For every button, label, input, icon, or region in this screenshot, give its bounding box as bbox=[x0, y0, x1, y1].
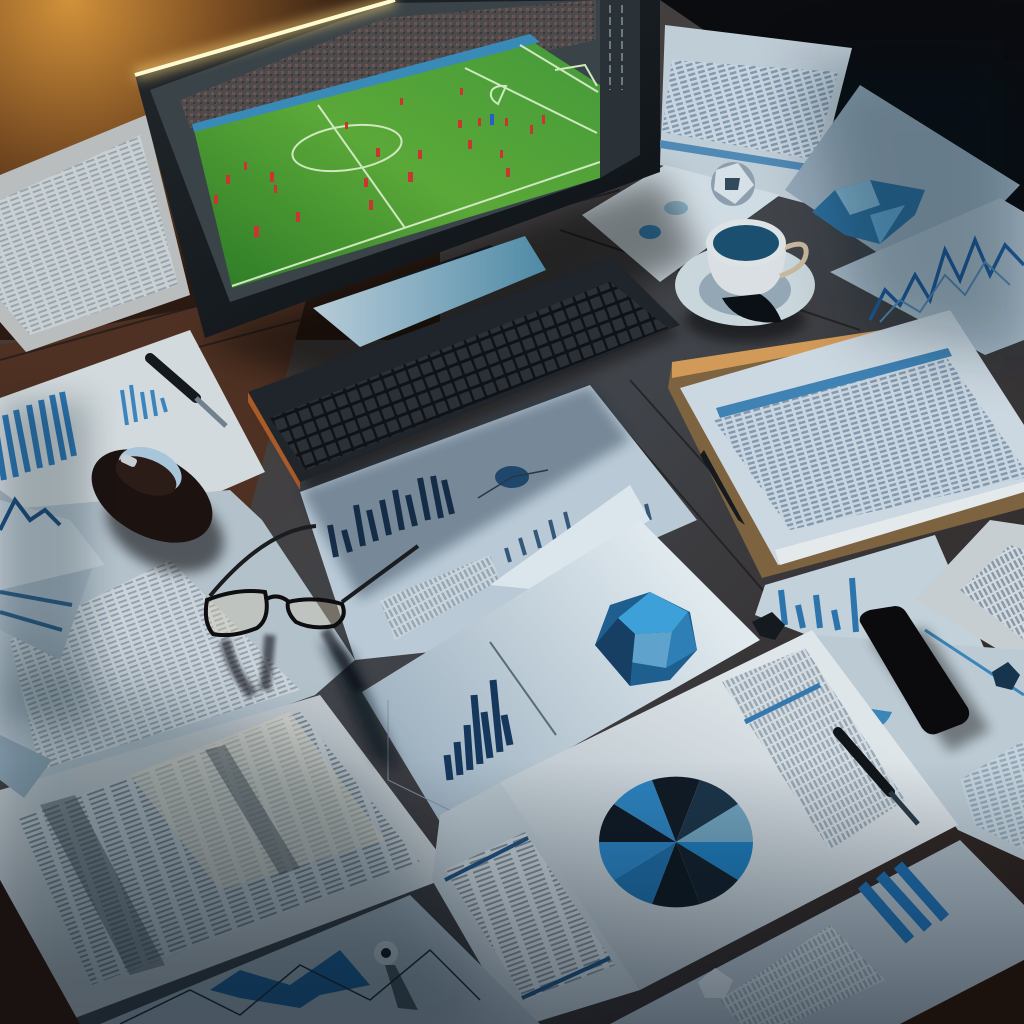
monitor shadow on desk bbox=[200, 175, 700, 400]
paper: line chart right bbox=[830, 198, 1024, 355]
monitor light edge bbox=[135, 0, 395, 75]
monitor stand bbox=[313, 236, 546, 347]
paper: center sheet with bars bbox=[300, 385, 697, 660]
keyboard bbox=[248, 258, 680, 490]
paper: bottom pie sheet bbox=[500, 630, 958, 990]
main shadow from monitor and keyboard bbox=[300, 385, 630, 600]
paper: top right spreadsheet bbox=[660, 25, 852, 205]
bars bbox=[0, 392, 74, 480]
icon: small cubes bbox=[374, 612, 1020, 1010]
players bbox=[214, 88, 545, 237]
paper: bottom line chart bbox=[100, 895, 540, 1024]
coffee cup and saucer bbox=[675, 219, 815, 342]
paper: bottom center table bbox=[432, 780, 640, 1024]
paper: right sheets behind phone bbox=[755, 520, 1024, 860]
paper: sheet with dots behind cup bbox=[582, 165, 780, 282]
paper: polygon pie top right bbox=[785, 85, 1020, 285]
paper: top left spreadsheet bbox=[0, 115, 190, 352]
mouse bbox=[76, 430, 238, 590]
paper: bottom right bars sheet bbox=[610, 840, 1024, 1024]
monitor bbox=[135, 0, 660, 338]
pen bbox=[150, 358, 226, 426]
icon: dots bbox=[639, 201, 688, 239]
pen on pie sheet bbox=[838, 732, 918, 824]
analysis side panel bbox=[600, 0, 640, 178]
icon: crystal ball on papers bbox=[711, 162, 755, 206]
diagonal shadow on lower papers bbox=[320, 640, 400, 770]
curled page bbox=[490, 485, 650, 590]
paper: main chart with polyhedron bbox=[362, 520, 760, 830]
bars bbox=[330, 476, 452, 557]
icon: polyhedron chart bbox=[595, 592, 697, 686]
paper: folded corner sheet bbox=[0, 735, 52, 798]
paper: bar chart with pen bbox=[0, 330, 265, 560]
paper: bottom left table bbox=[0, 695, 455, 1018]
folder with spreadsheet bbox=[668, 310, 1024, 578]
phone bbox=[860, 606, 990, 752]
pie chart bbox=[599, 777, 753, 907]
pitch bbox=[194, 40, 600, 288]
screen bbox=[150, 0, 600, 302]
paper: left large table bbox=[0, 490, 355, 800]
glasses bbox=[206, 526, 418, 695]
bars bbox=[447, 680, 510, 780]
